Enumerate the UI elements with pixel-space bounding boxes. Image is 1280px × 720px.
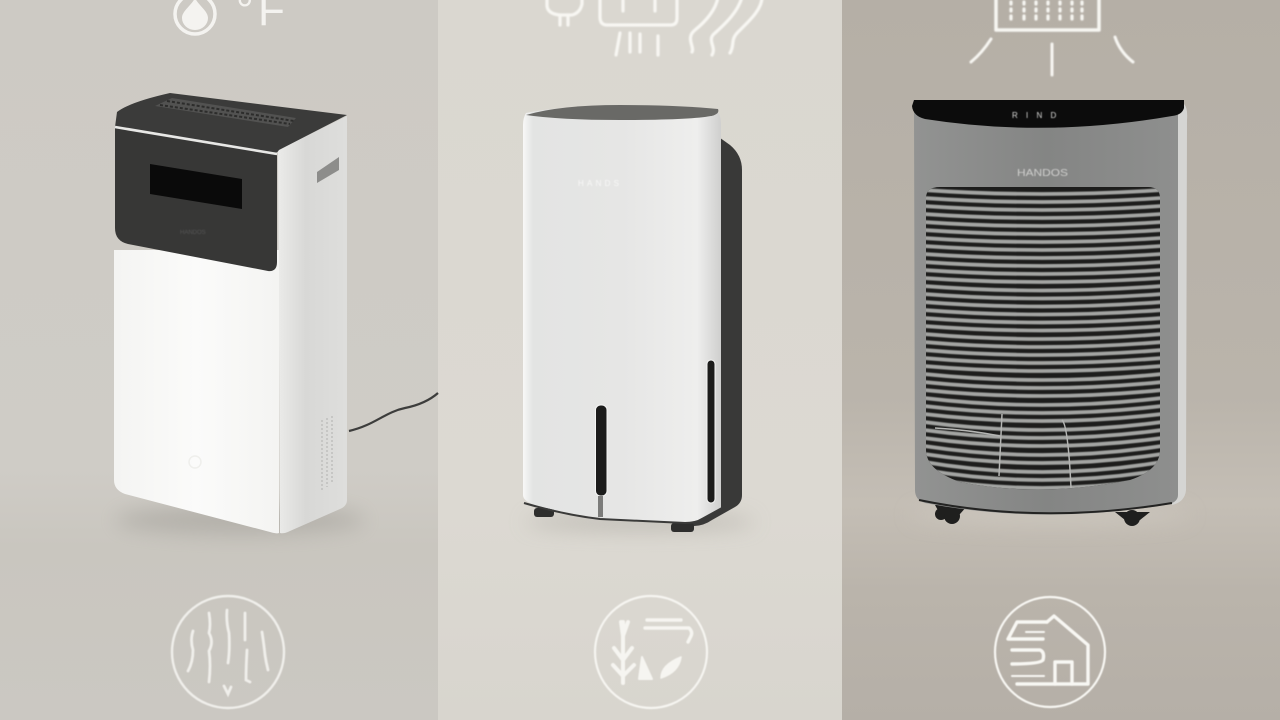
panel: right background (842, 0, 1280, 720)
right edge strip (1170, 104, 1187, 505)
power cable (349, 393, 438, 431)
floor shadow (525, 514, 755, 530)
floor shadow (115, 506, 365, 534)
water level window right (707, 360, 715, 503)
drain valve (598, 496, 603, 517)
brand label: HANDOS (1017, 168, 1068, 179)
grille inner frame (935, 414, 1071, 488)
side vent (322, 416, 332, 490)
base edge (524, 503, 722, 523)
top surface (115, 93, 347, 153)
icon: water drop and Fahrenheit (175, 0, 285, 35)
side face (278, 116, 347, 533)
front lower face (114, 250, 279, 533)
device label: HANDS (578, 179, 619, 188)
floor shadow (910, 505, 1190, 525)
icon: ceiling panel and rays (971, 0, 1133, 75)
highlight strip (115, 127, 277, 154)
feet (534, 508, 554, 517)
main body (914, 108, 1178, 515)
icon: condensation lines in circle (172, 596, 284, 708)
front logo (189, 456, 201, 468)
water level window left (596, 405, 607, 496)
display (150, 164, 242, 209)
top opening (526, 105, 718, 120)
panel: left device (114, 93, 438, 534)
icon: plant and leaf in circle (595, 596, 707, 708)
icon: plug, panel and warm air (547, 0, 762, 55)
panel: middle background (438, 0, 842, 720)
front dark panel (115, 127, 277, 271)
panel: middle device (523, 105, 755, 532)
casters (935, 505, 1150, 526)
panel: left background (0, 0, 438, 720)
panel: right device (910, 100, 1190, 526)
rear dark section (690, 135, 742, 526)
top vent (155, 98, 296, 127)
black control band (912, 100, 1184, 128)
front grille (920, 185, 1165, 495)
control glyphs: R I N D (1012, 111, 1059, 120)
main body (523, 106, 721, 522)
side handle (317, 157, 339, 183)
device label: HANDOS (180, 230, 206, 236)
base shadow line (919, 500, 1172, 513)
icon: house with air flow in circle (995, 597, 1105, 707)
